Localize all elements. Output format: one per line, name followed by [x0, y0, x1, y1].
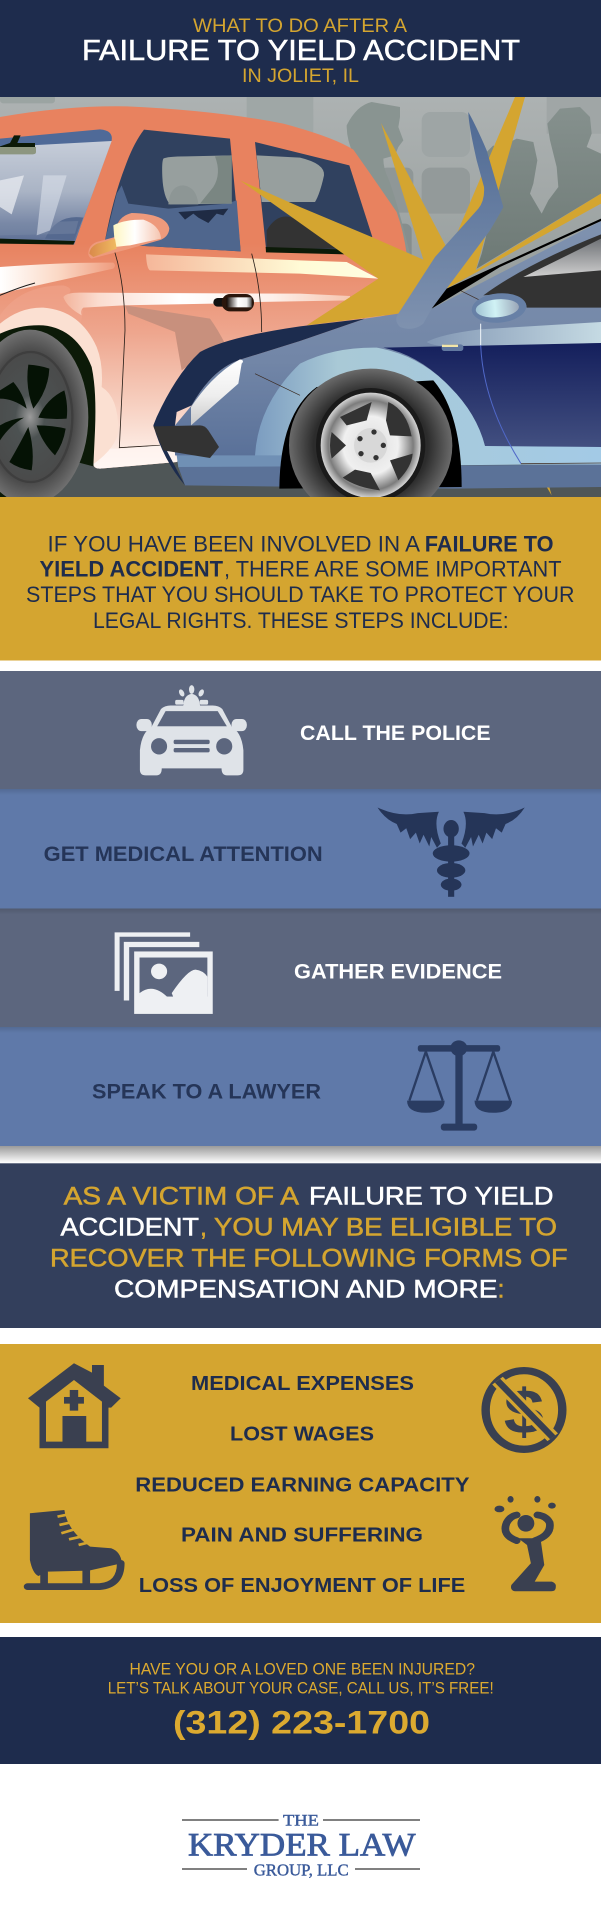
- step label: GET MEDICAL ATTENTION: [44, 843, 323, 866]
- blue car windshield: [483, 234, 601, 308]
- illustration part: starburst impact: [240, 97, 601, 495]
- compensation intro text: COMPENSATION AND MORE: [114, 1276, 498, 1304]
- step: gather evidence: [0, 908, 601, 1027]
- icon: no money: [486, 1371, 562, 1449]
- compensation intro text: ACCIDENT: [60, 1214, 199, 1242]
- compensation items: REDUCED EARNING CAPACITY: [135, 1473, 470, 1496]
- compensation items: MEDICAL EXPENSES: [191, 1372, 414, 1395]
- compensation items: [135, 1372, 470, 1597]
- call to action text: HAVE YOU OR A LOVED ONE BEEN INJURED?: [130, 1660, 475, 1678]
- illustration part: blue car raised hood: [396, 112, 601, 329]
- compensation intro text: FAILURE TO YIELD: [309, 1182, 554, 1210]
- step: speak to a lawyer: [0, 1027, 601, 1146]
- compensation intro panel: [0, 1163, 601, 1328]
- intro panel: [0, 497, 601, 660]
- step label: GATHER EVIDENCE: [294, 961, 502, 984]
- illustration part: blue car body: [153, 221, 601, 489]
- compensation intro text: :: [498, 1276, 504, 1304]
- illustration part: blue car side mirror: [470, 291, 528, 325]
- compensation items: LOSS OF ENJOYMENT OF LIFE: [139, 1574, 465, 1597]
- illustration part: orange car mirror: [88, 213, 169, 259]
- heading line: location: IN JOLIET, IL: [242, 66, 359, 87]
- compensation intro text: RECOVER THE FOLLOWING FORMS OF: [50, 1245, 568, 1273]
- call to action panel: LET’S TALK ABOUT YOUR CASE, CALL US, IT’S FREE!: [108, 1679, 494, 1697]
- intro text: , THERE ARE SOME IMPORTANT: [224, 557, 562, 582]
- compensation items: PAIN AND SUFFERING: [181, 1523, 423, 1546]
- logo: The Kryder Law Group, LLC: [182, 1812, 420, 1879]
- windshield: [0, 129, 112, 245]
- compensation list panel: [0, 1344, 601, 1623]
- icon: ice skate: [28, 1510, 122, 1587]
- icon: caduceus: [378, 807, 525, 897]
- step: call the police: [0, 671, 601, 789]
- compensation intro text: AS A VICTIM OF A: [64, 1182, 299, 1210]
- step: get medical attention: [0, 789, 601, 908]
- call to action panel: [0, 1637, 601, 1764]
- step label: SPEAK TO A LAWYER: [92, 1080, 321, 1103]
- intro text: FAILURE TO: [425, 532, 554, 557]
- compensation intro text: ,: [200, 1214, 207, 1242]
- background silhouettes: [347, 102, 601, 269]
- icon: distressed kneeling person: [494, 1496, 556, 1591]
- logo: The Kryder Law Group, LLC: GROUP, LLC: [254, 1860, 349, 1879]
- icon: no money: $: [504, 1377, 544, 1447]
- illustration: two cars colliding: [0, 97, 601, 497]
- compensation intro text: YOU MAY BE ELIGIBLE TO: [214, 1214, 557, 1242]
- heading line: what to do after a: WHAT TO DO AFTER A: [193, 16, 407, 37]
- icon: police car: [136, 685, 247, 775]
- title: FAILURE TO YIELD ACCIDENT: [82, 35, 520, 67]
- intro text: STEPS THAT YOU SHOULD TAKE TO PROTECT YOUR: [26, 582, 574, 607]
- logo: The Kryder Law Group, LLC: THE: [283, 1812, 319, 1829]
- illustration part: orange car rear wheel: [0, 308, 118, 504]
- intro text: LEGAL RIGHTS. THESE STEPS INCLUDE:: [93, 608, 509, 633]
- header banner: [0, 0, 601, 97]
- illustration part: blue car front wheel: [279, 369, 462, 522]
- intro text: IF YOU HAVE BEEN INVOLVED IN A: [48, 532, 420, 557]
- step label: CALL THE POLICE: [300, 722, 491, 745]
- intro text: [26, 532, 574, 633]
- illustration part: orange car body: [0, 106, 433, 469]
- compensation intro text: [50, 1182, 568, 1304]
- icon: photographs: [115, 932, 213, 1014]
- phone number: (312) 223-1700: [173, 1704, 430, 1740]
- icon: house with medical cross: [28, 1363, 121, 1448]
- compensation items: LOST WAGES: [230, 1422, 374, 1445]
- illustration part: orange car door handle: [213, 294, 254, 311]
- rear quarter window: [255, 142, 372, 254]
- rear side window: [105, 130, 241, 251]
- icon: scales of justice: [407, 1040, 512, 1131]
- logo: The Kryder Law Group, LLC: KRYDER LAW: [188, 1827, 416, 1863]
- intro text: YIELD ACCIDENT: [40, 557, 223, 582]
